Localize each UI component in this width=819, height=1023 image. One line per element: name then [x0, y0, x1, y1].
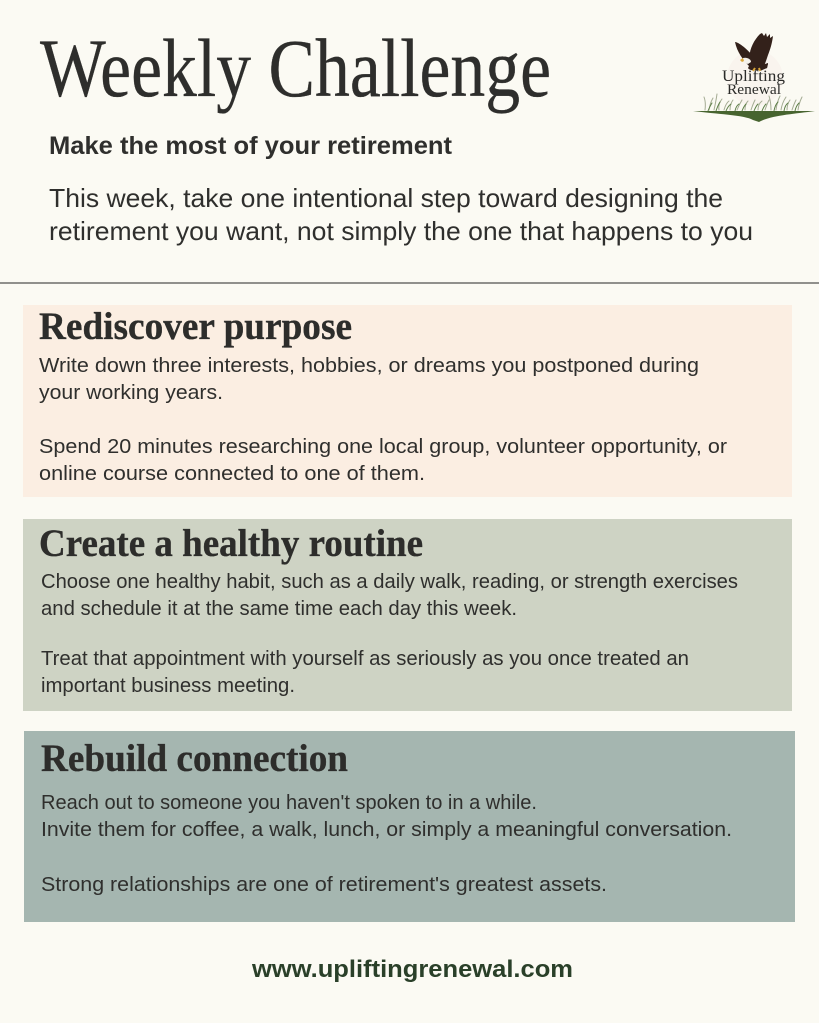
heading: Rediscover purpose [39, 305, 352, 348]
subtitle: Make the most of your retirement [49, 132, 453, 160]
footer website: www.upliftingrenewal.com [251, 956, 573, 983]
text block [41, 570, 738, 697]
intro text: retirement you want, not simply the one that happens to you [49, 216, 753, 246]
icon: ground [693, 111, 815, 122]
icon: eagle [735, 33, 773, 71]
text block: Write down three interests, hobbies, or dreams you postponed during [39, 354, 699, 377]
text block [41, 791, 732, 896]
text block: Choose one healthy habit, such as a daily walk, reading, or strength exercises [41, 570, 738, 593]
text block: important business meeting. [41, 674, 295, 697]
heading: Rebuild connection [41, 737, 348, 780]
text block: Treat that appointment with yourself as seriously as you once treated an [41, 647, 689, 670]
panel: rebuild connection [24, 731, 795, 922]
intro text [49, 183, 753, 246]
text block: and schedule it at the same time each day this week. [41, 597, 517, 620]
text block: Reach out to someone you haven't spoken to in a while. [41, 791, 537, 814]
text block: Strong relationships are one of retirement's greatest assets. [41, 873, 607, 896]
logo wordmark: Uplifting [722, 68, 785, 85]
intro text: This week, take one intentional step toward designing the [49, 183, 723, 213]
panel: create a healthy routine [23, 519, 792, 711]
title: Weekly Challenge [40, 22, 551, 114]
text block: Spend 20 minutes researching one local group, volunteer opportunity, or [39, 435, 727, 458]
text block: your working years. [39, 381, 223, 404]
text block: Invite them for coffee, a walk, lunch, or simply a meaningful conversation. [41, 818, 732, 841]
logo backdrop circle [727, 50, 783, 106]
icon: grass [704, 94, 802, 111]
logo: Renewal [727, 82, 781, 98]
text block [39, 354, 727, 485]
text block: online course connected to one of them. [39, 462, 425, 485]
heading: Create a healthy routine [39, 522, 423, 565]
logo [693, 33, 815, 122]
panel: rediscover purpose [23, 305, 792, 497]
